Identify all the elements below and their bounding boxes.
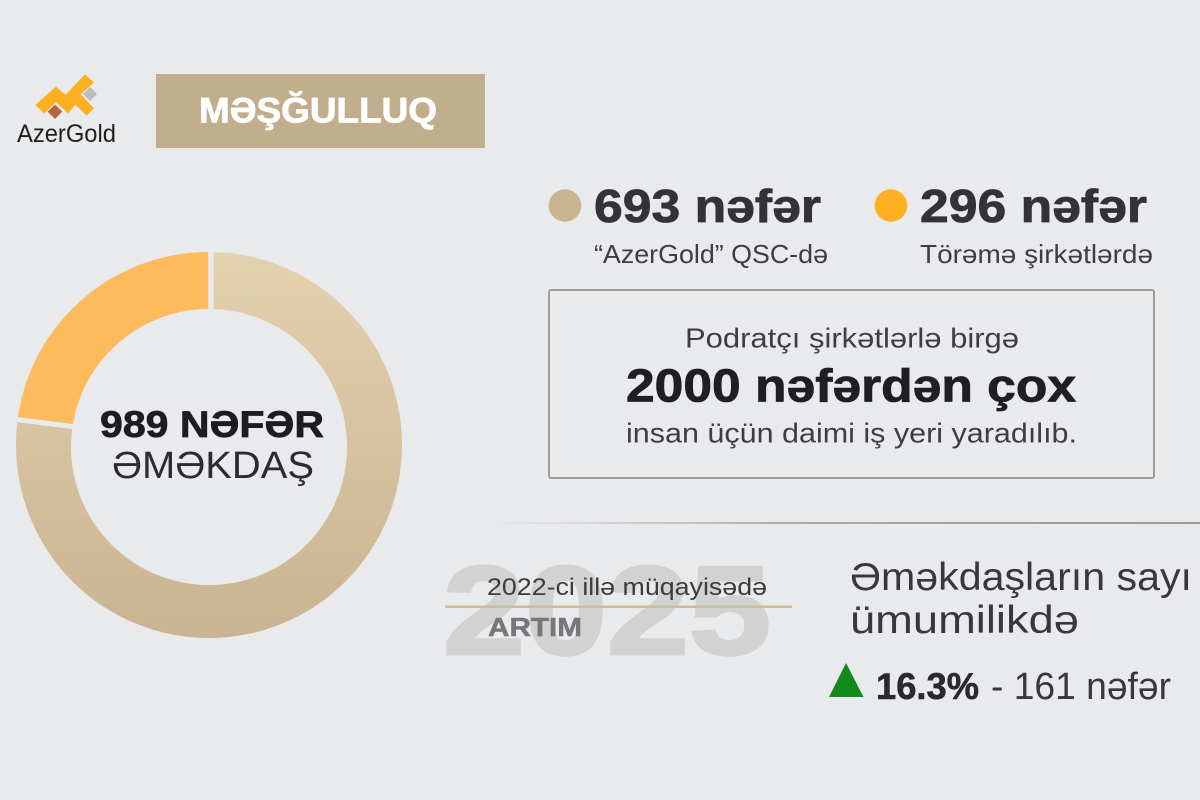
callout: contractors: 2000 nəfərdən çox <box>626 360 1076 412</box>
growth figure: - 161 nəfər <box>991 666 1171 708</box>
stat: subsidiary employees: Törəmə şirkətlərdə <box>920 239 1153 269</box>
donut centre label: 989 NƏFƏR <box>100 404 324 445</box>
title banner <box>156 74 485 148</box>
heading: total employees <box>850 556 1192 642</box>
year comparison block: 2022-ci illə müqayisədə <box>487 574 767 601</box>
growth figure: 16.3% <box>876 666 979 707</box>
stat: AzerGold employees: “AzerGold” QSC-də <box>594 239 828 269</box>
donut centre label: ƏMƏKDAŞ <box>112 445 314 487</box>
callout: contractors <box>549 290 1154 478</box>
year comparison block: 2025 <box>443 540 771 681</box>
stat: AzerGold employees: 693 nəfər <box>594 180 821 232</box>
heading: total employees: Əməkdaşların sayı <box>850 556 1192 599</box>
donut chart <box>12 248 402 638</box>
stat: subsidiary employees: 296 nəfər <box>920 180 1147 232</box>
growth figure <box>829 663 1171 708</box>
callout: contractors: insan üçün daimi iş yeri yaradılıb. <box>626 418 1077 448</box>
year comparison block: ARTIM <box>488 612 582 642</box>
title banner: MƏŞĞULLUQ <box>199 90 437 130</box>
stat: subsidiary employees <box>875 180 1153 269</box>
callout: contractors: Podratçı şirkətlərlə birgə <box>685 322 1019 354</box>
logo: AzerGold: AzerGold <box>17 120 116 148</box>
heading: total employees: ümumilikdə <box>850 599 1079 642</box>
logo: AzerGold <box>17 74 116 148</box>
stat: AzerGold employees <box>549 180 828 269</box>
donut centre label <box>100 404 324 487</box>
